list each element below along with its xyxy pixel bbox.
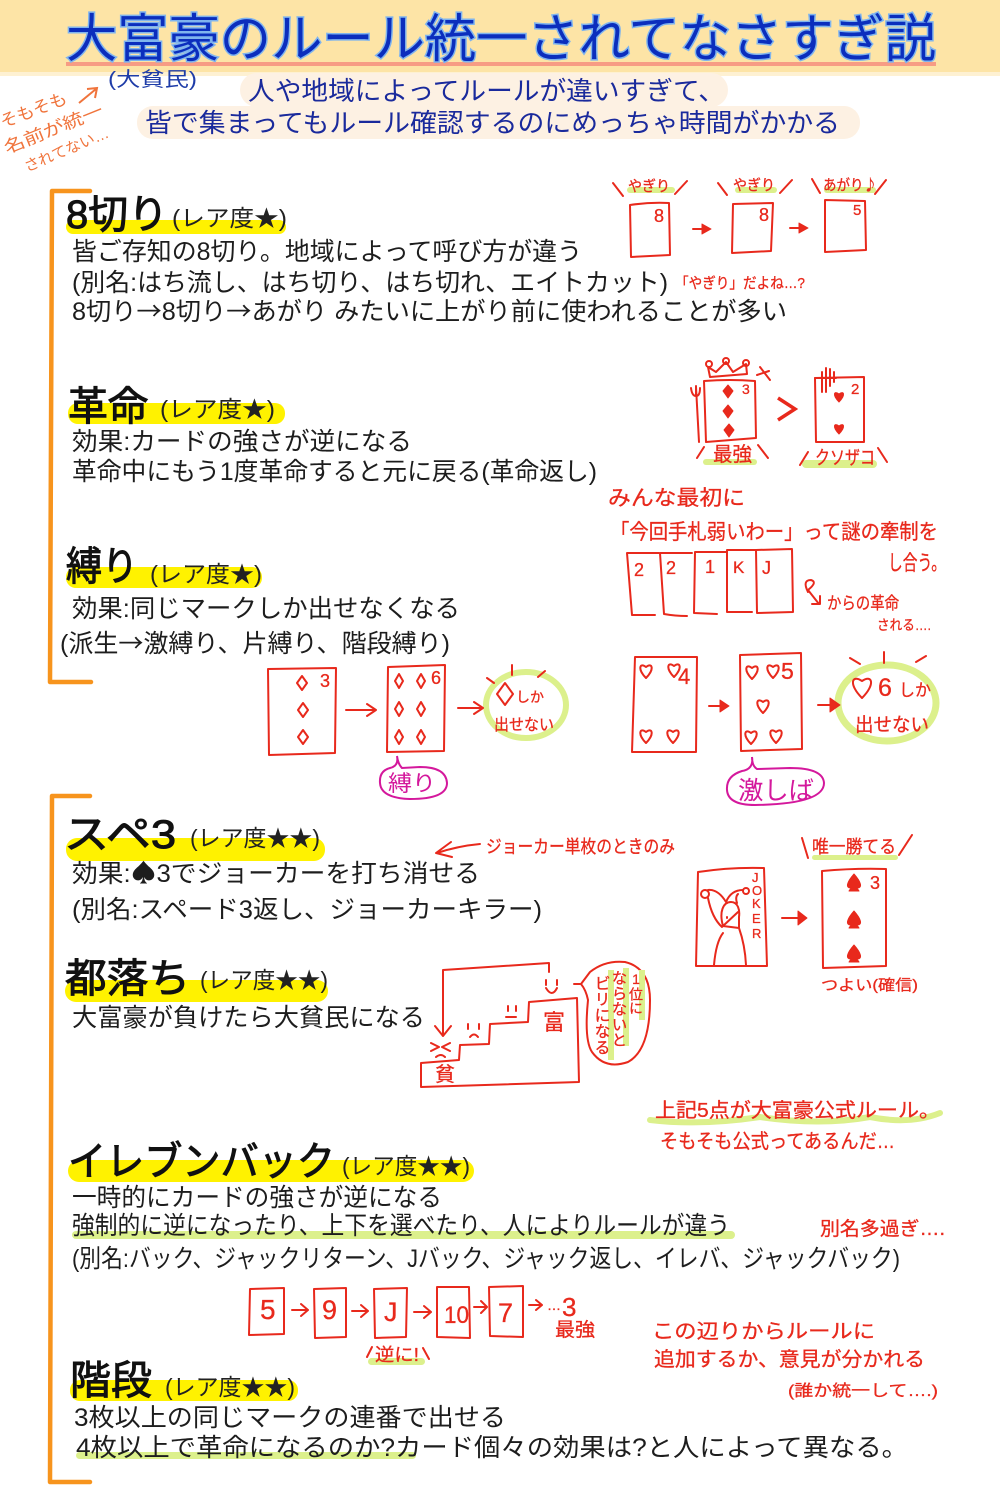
speech bubble: ビリになる: 1位に (628, 971, 644, 1015)
section: 革命: 革命中にもう1度革命すると元に戻る(革命返し) (72, 458, 597, 486)
diagram: joker beaten by spade 3: K (752, 896, 761, 911)
speech bubble: ビリになる (574, 962, 650, 1064)
title: 大富豪のルール統一されてなさすぎ説 (66, 11, 936, 69)
section: イレブンバック (68, 1140, 900, 1273)
diagram: 激しば heart cards (632, 652, 936, 805)
diagram: 激しば heart cards: 5 (781, 658, 794, 684)
diagram: 激しば heart cards: しか (899, 681, 931, 700)
diagram: joker beaten by spade 3: O (752, 883, 762, 898)
section: イレブンバック: 一時的にカードの強さが逆になる (72, 1184, 442, 1212)
section: 階段: 階段 (70, 1359, 152, 1403)
section: イレブンバック: イレブンバック (68, 1140, 335, 1184)
diagram: joker beaten by spade 3: つよい(確信) (821, 977, 918, 994)
diagram: 8切り cards: やぎり (733, 177, 775, 194)
diagram: staircase (421, 963, 579, 1087)
diagram: eleven back sequence: J (384, 1297, 398, 1327)
section: イレブンバック: 強制的に逆になったり、上下を選べたり、人によりルールが違う (72, 1212, 730, 1240)
diagram: joker beaten by spade 3: E (752, 911, 761, 926)
section: 都落ち: 都落ち (65, 957, 190, 1001)
diagram: eleven back sequence: 最強 (555, 1319, 595, 1341)
subtitle (137, 73, 860, 139)
speech bubble: ビリになる: ならないと (610, 970, 626, 1048)
diagram: strongest 3 vs weakest 2: 3 (742, 381, 750, 397)
diagram: 縛り diamond cards: 出せない (494, 716, 554, 734)
diagram: eleven back sequence: 逆に! (375, 1345, 419, 1365)
section: 8切り: (レア度★) (172, 205, 287, 231)
diagram: eleven back sequence: 10 (444, 1302, 469, 1329)
section: 階段: (レア度★★) (165, 1374, 295, 1400)
note: rule additions opinion: (誰か統一して….) (788, 1382, 938, 1400)
note: official rules: 上記5点が大富豪公式ルール。 (655, 1099, 940, 1122)
diagram: joker beaten by spade 3: J (752, 870, 758, 885)
section: イレブンバック: (レア度★★) (342, 1153, 470, 1179)
note: 手札弱いわー: みんな最初に (608, 487, 745, 510)
section: 階段: 4枚以上で革命になるのか?カード個々の効果は?と人によって異なる。 (76, 1434, 908, 1462)
note: rule additions opinion: 追加するか、意見が分かれる (654, 1348, 925, 1371)
note: rule additions opinion: この辺りからルールに (652, 1320, 875, 1343)
section: 階段: 3枚以上の同じマークの連番で出せる (74, 1404, 506, 1432)
section: 縛り: (派生→激縛り、片縛り、階段縛り) (60, 624, 450, 660)
bracket: basic rules top (50, 191, 91, 682)
section: 8切り: 8切り→8切り→あがり みたいに上がり前に使われることが多い (72, 292, 787, 328)
subtitle annotation: 大貧民: (大貧民) (108, 68, 197, 91)
section: 革命: (レア度★) (160, 396, 275, 422)
orange side note with arrow (0, 88, 111, 176)
section: 8切り (66, 193, 805, 328)
speech bubble: ビリになる: ビリになる (592, 975, 610, 1055)
note: joker single: ジョーカー単枚のときのみ (486, 837, 675, 857)
note: 手札弱いわー: し合う。 (888, 552, 946, 575)
diagram: strongest 3 vs weakest 2 (691, 358, 887, 469)
diagram: hand of five cards: 2 (666, 558, 676, 578)
diagram: hand of five cards: からの革命 (827, 594, 899, 613)
diagram: 縛り diamond cards: 3 (320, 671, 330, 691)
orange side note with arrow: 名前が統一 (1, 101, 106, 158)
header band with title (0, 0, 1000, 76)
note: 手札弱いわー: 「今回手札弱いわー」って謎の牽制を (610, 521, 938, 544)
section: 縛り: (レア度★) (150, 561, 262, 587)
diagram: eleven back sequence: 7 (498, 1298, 513, 1328)
diagram: 激しば heart cards: 激しば (738, 777, 814, 805)
diagram: 8切り cards: やぎり (628, 178, 670, 195)
diagram: strongest 3 vs weakest 2: 最強 (713, 443, 752, 466)
diagram: 8切り cards: 8 (759, 205, 769, 225)
diagram: 8切り cards: あがり♪ (823, 174, 877, 195)
diagram: 激しば heart cards: 4 (678, 664, 690, 689)
section: 都落ち: (レア度★★) (200, 967, 328, 993)
section: イレブンバック: (別名:バック、ジャックリターン、Jバック、ジャック返し、イレバ、ジャックバック) (72, 1245, 900, 1273)
note: official rules (650, 1099, 940, 1153)
section: 階段 (70, 1359, 908, 1462)
section: 縛り: 効果:同じマークしか出せなくなる (72, 595, 460, 623)
diagram: hand of five cards: される…. (877, 617, 931, 633)
section: 革命 (68, 385, 597, 486)
diagram: hand of five cards (627, 549, 931, 633)
section: スペ3: (レア度★★) (190, 825, 320, 851)
section: 革命: 効果:カードの強さが逆になる (72, 428, 412, 456)
diagram: staircase: 富 (543, 1010, 565, 1035)
diagram: hand of five cards: J (762, 558, 771, 578)
diagram: 縛り diamond cards (268, 665, 566, 799)
note: 手札弱いわー (608, 487, 946, 575)
diagram: strongest 3 vs weakest 2: 2 (851, 381, 859, 398)
diagram: joker beaten by spade 3: 3 (870, 873, 880, 893)
diagram: eleven back sequence: 3 (562, 1292, 576, 1322)
diagram: 縛り diamond cards: しか (516, 689, 544, 705)
diagram: hand of five cards: 2 (634, 560, 644, 580)
section: スペ3 (64, 813, 542, 924)
section: 8切り: 8切り (66, 193, 168, 237)
diagram: eleven back sequence: 5 (260, 1294, 276, 1325)
diagram: eleven back sequence: … (547, 1297, 561, 1313)
diagram: 8切り cards: 5 (853, 202, 861, 219)
diagram: joker beaten by spade 3: 唯一勝てる (812, 837, 896, 857)
note: rule additions opinion (652, 1320, 938, 1400)
subtitle: 人や地域によってルールが違いすぎて、 (248, 76, 725, 106)
diagram: joker beaten by spade 3: R (752, 926, 761, 941)
section: 都落ち (65, 957, 425, 1032)
subtitle: 皆で集まってもルール確認するのにめっちゃ時間がかかる (145, 108, 840, 138)
section: 都落ち: 大富豪が負けたら大貧民になる (72, 1004, 425, 1032)
section: スペ3: (別名:スペード3返し、ジョーカーキラー) (72, 896, 542, 924)
diagram: eleven back sequence (249, 1286, 595, 1365)
orange side note with arrow: されてない… (22, 125, 111, 176)
section: 縛り: 縛り (66, 545, 138, 589)
diagram: joker beaten by spade 3 (696, 835, 918, 994)
section: 縛り (60, 545, 460, 660)
bracket: basic rules bottom (50, 796, 90, 1482)
section: 8切り: 「やぎり」だよね…? (675, 275, 805, 292)
diagram: staircase: 貧 (435, 1063, 455, 1086)
section: 8切り: 皆ご存知の8切り。地域によって呼び方が違う (72, 238, 582, 266)
section: 革命: 革命 (68, 385, 148, 429)
diagram: 縛り diamond cards: 縛り (388, 771, 436, 796)
diagram: strongest 3 vs weakest 2: クソザコ (815, 447, 875, 469)
diagram: 8切り cards (613, 174, 886, 257)
diagram: 激しば heart cards: 6 (878, 674, 892, 702)
diagram: hand of five cards: K (733, 558, 745, 577)
diagram: 縛り diamond cards: 6 (431, 668, 441, 688)
diagram: eleven back sequence: 9 (322, 1295, 337, 1325)
note: too many aliases: 別名多過ぎ…. (820, 1218, 945, 1240)
diagram: 激しば heart cards: 出せない (855, 714, 929, 736)
section: スペ3: スペ3 (64, 813, 176, 857)
diagram: hand of five cards: 1 (705, 557, 715, 577)
section: スペ3: 効果:♠3でジョーカーを打ち消せる (72, 854, 480, 890)
diagram: 8切り cards: 8 (654, 206, 664, 226)
note: official rules: そもそも公式ってあるんだ… (660, 1130, 895, 1153)
section: 8切り: (別名:はち流し、はち切り、はち切れ、エイトカット) (72, 269, 668, 297)
